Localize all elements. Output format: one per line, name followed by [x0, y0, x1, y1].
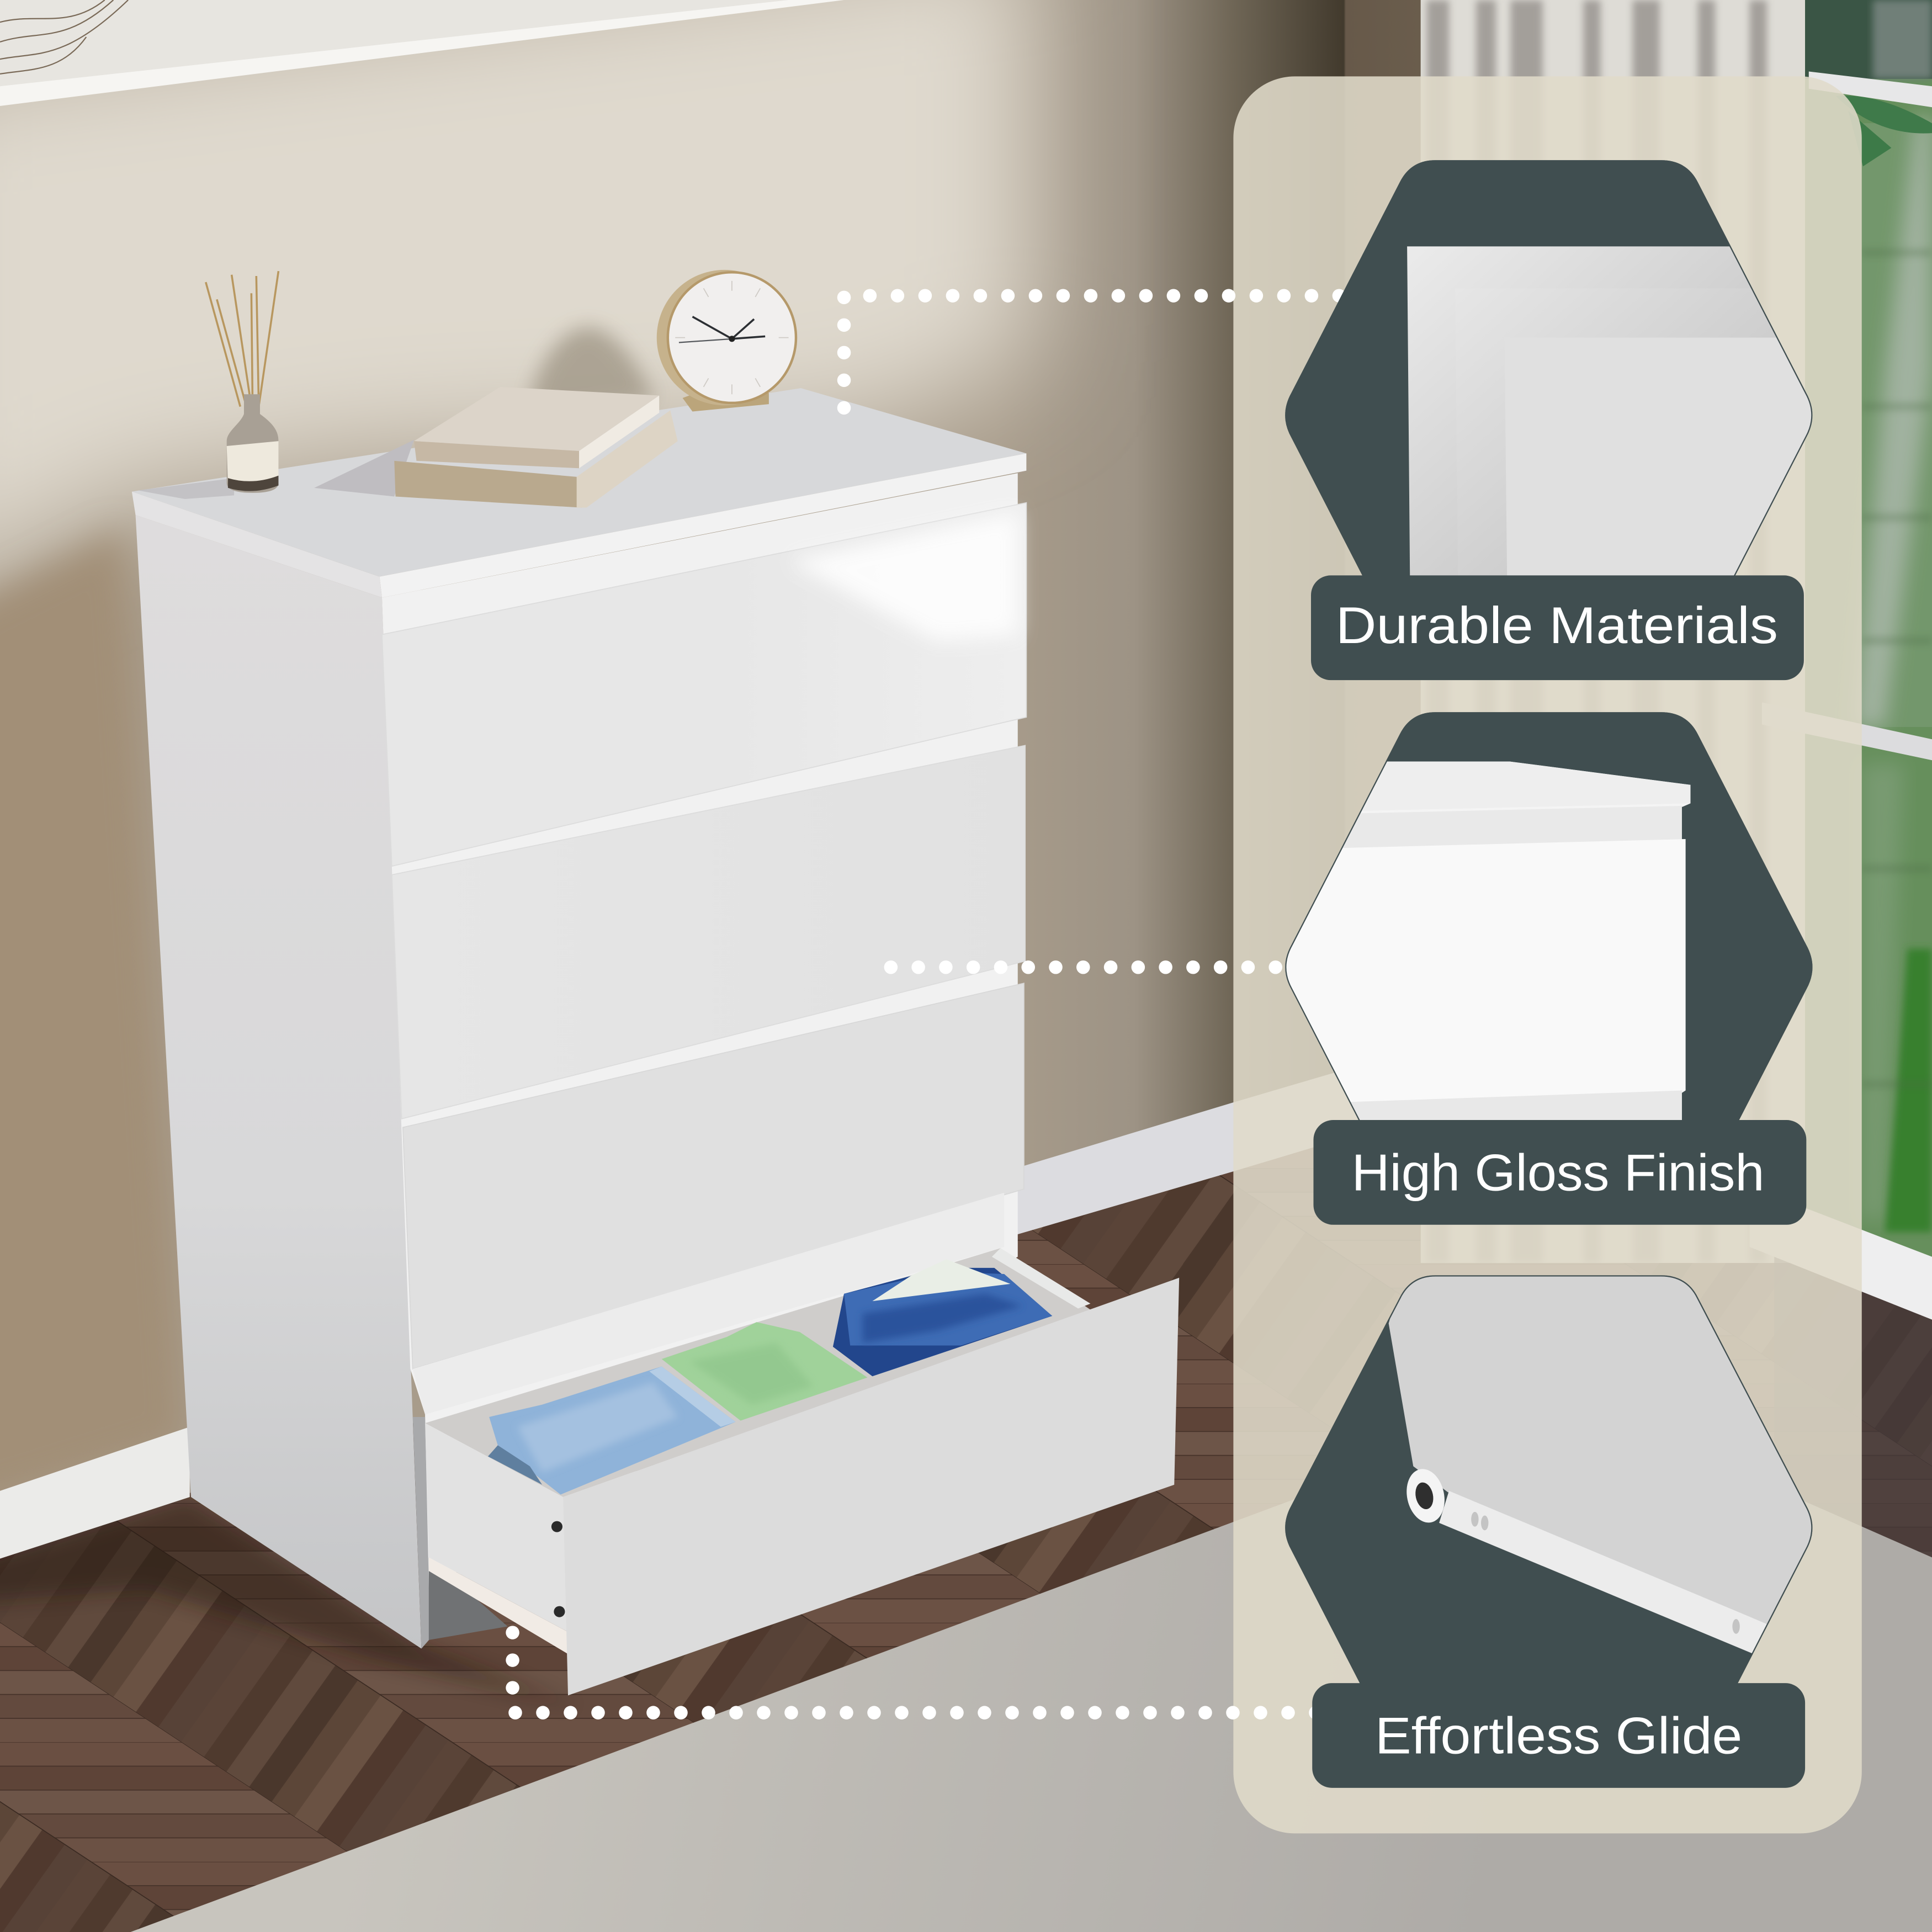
shadow on floor — [0, 1497, 579, 1707]
curtain — [1421, 0, 1805, 1263]
floor tint by window — [1774, 1257, 1932, 1577]
floor — [0, 1115, 1932, 1932]
front frame — [382, 473, 1018, 1589]
baseboards — [0, 1047, 1421, 1559]
feature panel background — [1233, 76, 1862, 1833]
drawer left wall — [425, 1423, 569, 1655]
feature: high gloss finish — [1257, 702, 1824, 1232]
label: durable materials: Durable Materials — [1336, 596, 1778, 654]
feature: effortless glide — [1269, 1263, 1824, 1793]
picture frame on wall — [0, 0, 844, 106]
drawer 1 — [382, 503, 1026, 866]
drawer right wall — [992, 1248, 1090, 1309]
dotted connector: effortless glide — [513, 1633, 1318, 1713]
drawer interior — [425, 1248, 1090, 1497]
front edge of side — [413, 1417, 430, 1649]
window sill — [1750, 1187, 1932, 1320]
top surface — [132, 388, 1026, 577]
rug — [131, 1397, 1932, 1932]
wall shadow behind books — [530, 327, 656, 419]
open drawer with clothes — [425, 1248, 1179, 1695]
jeans — [488, 1366, 736, 1495]
shadows on top — [138, 440, 414, 499]
drawer front — [563, 1278, 1179, 1695]
hexagon: drawer runner close-up — [1269, 1263, 1824, 1793]
drawer 3 — [403, 983, 1024, 1369]
window with garden — [1762, 0, 1932, 1269]
reed diffuser — [206, 271, 278, 493]
books — [394, 387, 678, 508]
green shirt — [662, 1322, 867, 1421]
label: durable materials — [1311, 575, 1804, 680]
label: effortless glide: Effortless Glide — [1375, 1706, 1742, 1764]
top front edge — [132, 453, 1026, 598]
hexagon: gloss drawer close-up — [1285, 712, 1813, 1120]
navy hoodie — [833, 1259, 1052, 1376]
drawer 2 — [392, 745, 1025, 1119]
dotted connector: high gloss finish — [891, 964, 1284, 970]
recess below chest — [429, 1557, 508, 1640]
label: high gloss finish: High Gloss Finish — [1352, 1143, 1764, 1201]
hexagon: layered panels — [1285, 160, 1813, 575]
label: high gloss finish — [1313, 1120, 1806, 1225]
dotted connector: durable materials — [844, 296, 1346, 408]
feature: durable materials — [1269, 148, 1824, 680]
chest of drawers — [132, 388, 1026, 1649]
label: effortless glide — [1312, 1683, 1805, 1788]
lower rail — [413, 1193, 1004, 1414]
side panel — [136, 515, 421, 1649]
table clock — [657, 270, 797, 412]
